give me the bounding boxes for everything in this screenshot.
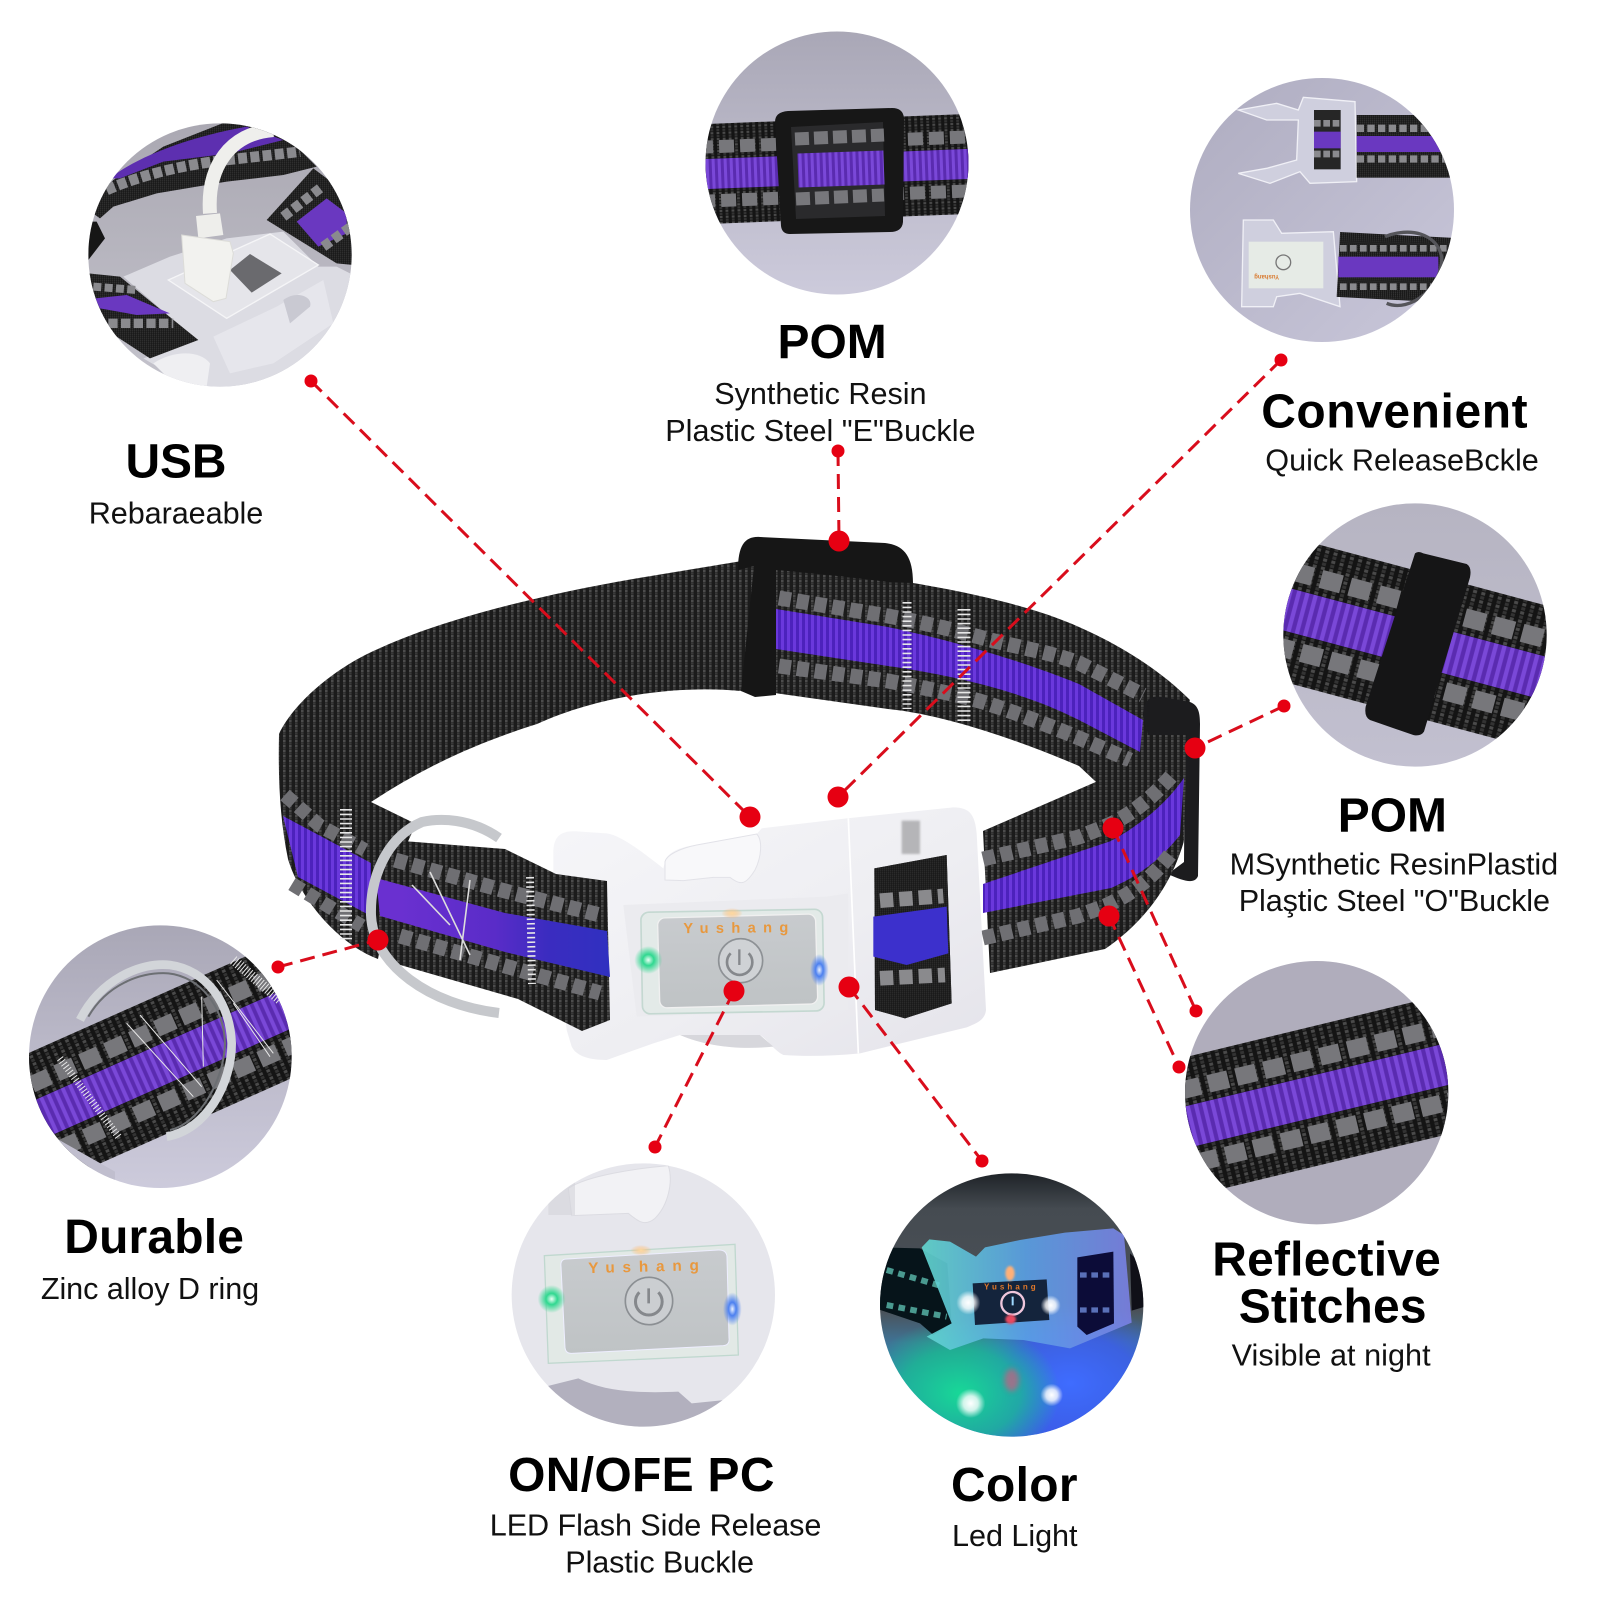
power button bbox=[625, 1277, 673, 1325]
brand label: Yushang bbox=[984, 1282, 1036, 1291]
right strap bbox=[267, 168, 353, 265]
power button bbox=[719, 939, 763, 983]
text: LED Flash Side Release: LED Flash Side Release bbox=[490, 1509, 821, 1543]
brand label: Yushang bbox=[588, 1257, 699, 1277]
button plate with QR bbox=[168, 234, 318, 318]
left strap stub bbox=[88, 222, 105, 260]
leader: convenient bbox=[828, 354, 1288, 808]
E buckle bbox=[738, 537, 913, 697]
callout lines and dots bbox=[272, 354, 1290, 1168]
panel: POM E buckle detail circle bbox=[706, 32, 968, 294]
leader: POM E buckle bbox=[828, 444, 850, 552]
panel: quick release detail circle bbox=[1188, 77, 1457, 343]
right webbing in buckle window bbox=[873, 855, 952, 1018]
heading: ON/OFE PC: ON/OFE PC bbox=[508, 1449, 774, 1502]
metal plate bbox=[657, 914, 818, 1008]
text: Zinc alloy D ring: Zinc alloy D ring bbox=[41, 1272, 259, 1306]
panel: color light detail circle bbox=[880, 1173, 1144, 1437]
inner left webbing at buckle bbox=[374, 841, 610, 1031]
text: Visible at night: Visible at night bbox=[1232, 1338, 1431, 1372]
back right webbing with stripe bbox=[760, 566, 1190, 795]
text: MSynthetic ResinPlastid: MSynthetic ResinPlastid bbox=[1230, 847, 1558, 881]
text: Plastic Steel E Buckle: Plastic Steel "E"Buckle bbox=[665, 414, 976, 448]
heading: USB: USB bbox=[126, 436, 227, 489]
strap bbox=[1283, 544, 1547, 739]
collar photo bbox=[279, 537, 1200, 1060]
D ring bbox=[80, 965, 232, 1137]
front right webbing bbox=[983, 734, 1187, 973]
O buckle bbox=[1143, 697, 1200, 881]
back left plain webbing bbox=[279, 559, 760, 810]
D ring bbox=[371, 820, 499, 1013]
lower left strap bbox=[88, 273, 198, 358]
straps bbox=[878, 1247, 1145, 1335]
upper strap bbox=[1238, 97, 1457, 183]
text: Synthetic Resin: Synthetic Resin bbox=[714, 377, 927, 411]
panel: POM O buckle detail circle bbox=[1283, 503, 1547, 767]
dark plate bbox=[973, 1279, 1049, 1325]
glowing buckle bbox=[922, 1228, 1132, 1350]
leader: reflective B bbox=[1098, 906, 1186, 1074]
LEDs bbox=[538, 1245, 742, 1326]
front left webbing bbox=[279, 734, 416, 959]
metal plate bbox=[561, 1250, 729, 1353]
LED glows bbox=[956, 1266, 1061, 1324]
panel: reflective stitches detail circle bbox=[1184, 961, 1448, 1224]
text: Quick ReleaseBckle: Quick ReleaseBckle bbox=[1265, 443, 1539, 477]
text: Rebaraeable: Rebaraeable bbox=[89, 496, 263, 530]
lower buckle and strap bbox=[1242, 220, 1453, 307]
side release buckle bbox=[553, 807, 986, 1060]
slide buckle bbox=[775, 108, 904, 234]
strap bbox=[29, 956, 292, 1168]
buckle tab bbox=[568, 1166, 670, 1223]
heading: Convenient: Convenient bbox=[1261, 386, 1528, 439]
leader: D ring bbox=[272, 930, 388, 974]
clear buckle body bbox=[123, 232, 357, 393]
brand label: Yushang bbox=[683, 920, 788, 937]
text: Plastic Buckle: Plastic Buckle bbox=[565, 1545, 754, 1579]
heading: POM right: POM bbox=[1338, 790, 1447, 843]
lavender table bbox=[548, 1378, 722, 1427]
strap bbox=[504, 836, 1600, 1355]
heading: POM: POM bbox=[778, 316, 887, 369]
floor glow bbox=[888, 1319, 1142, 1437]
heading: Stitches: Stitches bbox=[1239, 1280, 1427, 1333]
leader: ON/OFF bbox=[648, 980, 744, 1154]
text: Led Light: Led Light bbox=[952, 1519, 1078, 1553]
panel: on/off button detail circle bbox=[510, 1162, 777, 1438]
strap bbox=[706, 114, 968, 224]
heading: Color: Color bbox=[951, 1459, 1078, 1512]
top strap bbox=[88, 122, 317, 218]
stitching bbox=[60, 960, 280, 1137]
background cut bbox=[58, 1140, 115, 1180]
LEDs bbox=[634, 908, 829, 986]
lower buckle and strap: Yushang bbox=[1254, 273, 1279, 279]
power icon bbox=[1001, 1292, 1024, 1315]
text labels bbox=[41, 316, 1558, 1579]
heading: Durable: Durable bbox=[64, 1211, 244, 1264]
panel: D ring detail circle bbox=[29, 925, 292, 1188]
keeper loop bbox=[1365, 552, 1471, 735]
USB cable bbox=[182, 130, 273, 302]
leader: POM O buckle bbox=[1184, 700, 1290, 758]
text: Plastic Steel O Buckle: Plaştic Steel "O"Buckle bbox=[1239, 884, 1550, 918]
right strap window bbox=[1077, 1252, 1114, 1335]
buckle tab bbox=[665, 834, 761, 883]
panel: USB detail circle bbox=[87, 122, 357, 393]
leader: color bbox=[838, 976, 988, 1168]
LED board bbox=[641, 909, 824, 1014]
heading: Reflective: Reflective bbox=[1212, 1233, 1441, 1287]
LED board bbox=[544, 1244, 738, 1363]
leader: USB bbox=[304, 374, 760, 828]
leader: reflective A bbox=[1102, 818, 1202, 1018]
